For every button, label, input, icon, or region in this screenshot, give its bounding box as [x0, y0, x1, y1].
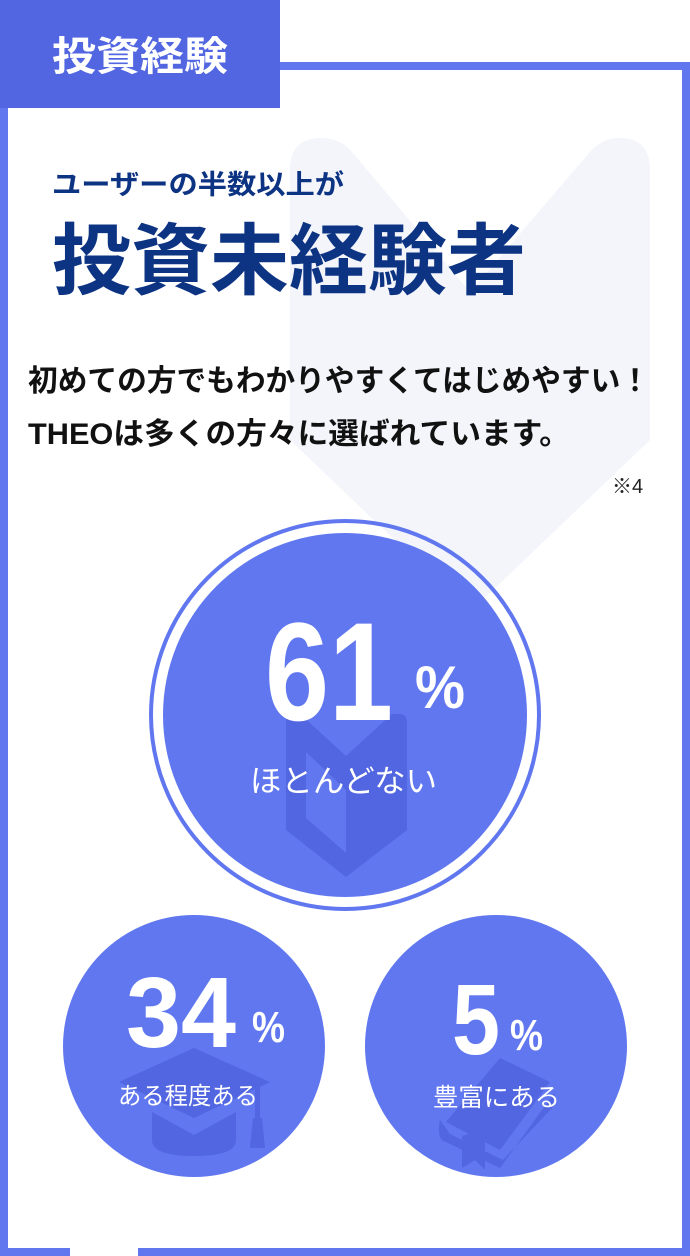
big circle: 61%: % — [415, 654, 465, 721]
circle: 5%: 5 — [452, 964, 500, 1076]
circle: 5% — [365, 915, 627, 1177]
circle: 34%: 34 — [126, 957, 236, 1069]
big circle: 61% — [151, 521, 539, 909]
circle: 5%: % — [510, 1011, 543, 1060]
body text: 初めての方でもわかりやすくてはじめやすい！ — [28, 365, 650, 398]
icon: beginner mark — [286, 714, 407, 877]
icon: book — [439, 1058, 555, 1170]
circle: 34% — [63, 915, 325, 1177]
footnote: ※4 — [612, 476, 643, 498]
circle: 34%: ある程度ある — [118, 1083, 258, 1110]
subtitle: ユーザーの半数以上が — [52, 169, 344, 200]
circle: 5%: 豊富にある — [433, 1084, 560, 1112]
big circle: 61%: 61 — [265, 593, 393, 750]
tab: 投資経験: 投資経験 — [52, 35, 228, 79]
body text: THEOは多くの方々に選ばれています。 — [28, 418, 570, 451]
big circle: 61%: ほとんどない — [250, 764, 437, 799]
icon: graduation cap — [119, 1048, 270, 1156]
body text — [28, 365, 650, 451]
tab: 投資経験 — [0, 0, 280, 108]
main title: 投資未経験者 — [52, 217, 526, 305]
background beginner mark — [290, 138, 650, 612]
circle: 34%: % — [252, 1003, 285, 1052]
